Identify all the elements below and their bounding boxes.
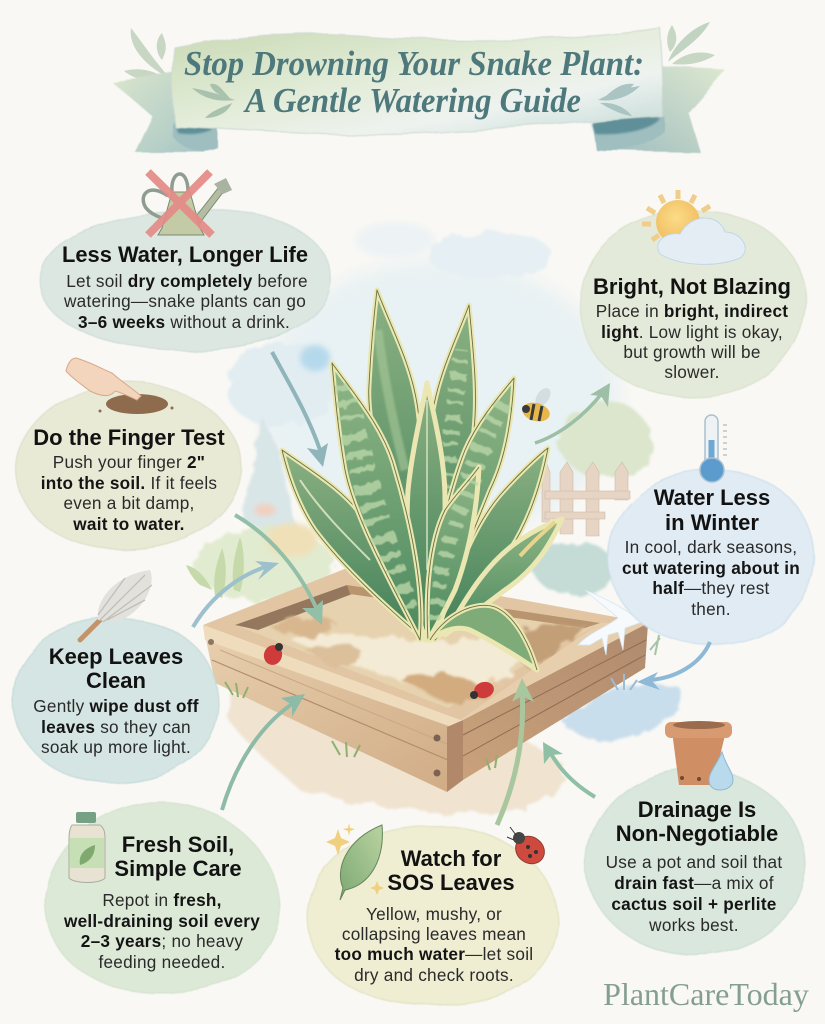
- leaf: droop: [430, 605, 537, 670]
- banner left tail: [112, 72, 205, 152]
- text block: less water: watering—snake plants can go: [63, 291, 306, 311]
- text block: fresh soil: Repot in fresh,: [102, 890, 222, 910]
- box corner post: [447, 720, 463, 792]
- leaf: back left: [369, 290, 431, 640]
- text block: drainage: drain fast—a mix of: [614, 873, 774, 893]
- leaf: lowest right: [445, 519, 562, 635]
- banner main: [173, 28, 663, 135]
- icon: fertilizer bottle: [69, 812, 105, 882]
- text block: fresh soil: [63, 832, 260, 972]
- icon: ladybug on SOS bubble: [507, 827, 550, 869]
- banner left fold: [172, 122, 218, 151]
- text block: keep leaves: Clean: [86, 668, 146, 693]
- garden fence: [542, 462, 630, 536]
- ground wash under box: [226, 680, 682, 812]
- text block: SOS leaves: [335, 846, 533, 985]
- icon: ladybug on box left: [261, 643, 285, 667]
- text block: finger test: into the soil. If it feels: [41, 473, 217, 493]
- text block: drainage: cactus soil + perlite: [611, 894, 777, 914]
- banner right fold: [592, 116, 664, 150]
- text block: fresh soil: Simple Care: [114, 856, 242, 881]
- title text: A Gentle Watering Guide: [243, 81, 581, 120]
- text block: finger test: [33, 425, 225, 534]
- text block: bright: light. Low light is okay,: [601, 322, 783, 342]
- text block: less water: 3–6 weeks without a drink.: [78, 312, 290, 332]
- bubble: bright: [580, 211, 806, 397]
- title text: Stop Drowning Your Snake Plant:: [184, 44, 644, 83]
- bubble: winter: [608, 470, 815, 645]
- text block: SOS leaves: dry and check roots.: [354, 965, 514, 985]
- arrow: drainage to box: [543, 742, 595, 797]
- text block: keep leaves: soak up more light.: [41, 737, 191, 757]
- text block: bright: [593, 274, 791, 382]
- leaf: right mid: [448, 376, 516, 540]
- text block: finger test: wait to water.: [72, 514, 185, 534]
- text block: drainage: Non-Negotiable: [616, 821, 778, 846]
- text block: fresh soil: 2–3 years; no heavy: [81, 931, 243, 951]
- leaf: front center right: [427, 467, 479, 640]
- snake plant: [282, 290, 562, 670]
- leaf: back right: [433, 302, 478, 496]
- icon: leaf with sparkles: [326, 823, 384, 900]
- text block: less water: Less Water, Longer Life: [62, 242, 308, 267]
- text block: winter: then.: [691, 599, 731, 619]
- arrow: fresh soil to box: [222, 694, 305, 810]
- bubble: SOS: [308, 826, 558, 1005]
- text block: finger test: Push your finger 2": [53, 452, 205, 472]
- text block: finger test: even a bit damp,: [63, 493, 195, 513]
- arrow: less water to plant: [272, 352, 328, 467]
- wooden planter box: [203, 568, 648, 792]
- arrow: winter to box: [637, 642, 710, 690]
- watercolor garden background: [186, 222, 651, 601]
- text block: winter: in Winter: [665, 510, 759, 535]
- text block: winter: half—they rest: [652, 578, 770, 598]
- icon: finger pointing at soil: [66, 358, 174, 414]
- text block: drainage: works best.: [648, 915, 739, 935]
- bubble: drainage: [587, 768, 805, 955]
- banner right fold shadow: [592, 117, 660, 134]
- arrow: keep leaves to plant: [193, 561, 279, 627]
- text block: bright: Bright, Not Blazing: [593, 274, 791, 299]
- text block: SOS leaves: Yellow, mushy, or: [366, 904, 502, 924]
- text block: drainage: Use a pot and soil that: [606, 852, 782, 872]
- bubble: keep leaves: [13, 618, 218, 783]
- leaf: right lower: [435, 448, 548, 640]
- banner left fold shadow: [176, 123, 216, 134]
- icon: thermometer: [700, 415, 727, 482]
- arrow: plant to bright: [535, 383, 610, 443]
- text block: SOS leaves: Watch for: [401, 846, 502, 871]
- snow on box corner: [578, 590, 642, 655]
- box front left face: [203, 625, 460, 792]
- text block: bright: slower.: [664, 362, 720, 382]
- text block: SOS leaves: too much water—let soil: [335, 944, 533, 964]
- box rear inner walls and soil: [203, 568, 648, 720]
- text block: fresh soil: Fresh Soil,: [122, 832, 234, 857]
- icon: sun and cloud: [642, 190, 745, 264]
- icon: feather duster: [80, 570, 152, 640]
- text block: winter: cut watering about in: [622, 558, 800, 578]
- text block: drainage: [606, 797, 782, 935]
- text block: bright: Place in bright, indirect: [596, 301, 788, 321]
- banner right tail: [602, 66, 725, 152]
- text block: keep leaves: leaves so they can: [41, 717, 191, 737]
- text block: SOS leaves: SOS Leaves: [387, 870, 515, 895]
- banner ribbon: [112, 28, 725, 152]
- icon: terracotta pot with drop: [665, 721, 733, 790]
- text block: drainage: Drainage Is: [638, 797, 756, 822]
- leaf: center: [407, 383, 445, 640]
- leaf: left big: [332, 363, 421, 640]
- text block: less water: Let soil dry completely before: [66, 271, 308, 291]
- bubble: fresh soil: [45, 802, 280, 993]
- leaf: far left: [282, 450, 425, 640]
- text block: SOS leaves: collapsing leaves mean: [342, 924, 526, 944]
- icon: bee: [520, 385, 554, 424]
- icon: watering can crossed out: [143, 172, 232, 235]
- text block: winter: [622, 485, 800, 619]
- box right face: [463, 623, 648, 780]
- arrow: SOS to plant: [497, 678, 534, 825]
- logo: PlantCareToday: PlantCareToday: [603, 976, 809, 1012]
- bubble: finger test: [16, 382, 242, 550]
- text block: less water: [62, 242, 308, 332]
- bubble: less water: [40, 211, 330, 350]
- text block: winter: In cool, dark seasons,: [625, 537, 797, 557]
- text block: fresh soil: feeding needed.: [98, 952, 226, 972]
- text block: winter: Water Less: [654, 485, 770, 510]
- text block: keep leaves: [33, 644, 199, 757]
- text block: keep leaves: Keep Leaves: [49, 644, 183, 669]
- grass tufts: [225, 635, 660, 770]
- banner inner leaf left: [192, 84, 235, 118]
- text block: finger test: Do the Finger Test: [33, 425, 225, 450]
- arrow: finger test to soil: [235, 515, 323, 625]
- text block: keep leaves: Gently wipe dust off: [33, 696, 199, 716]
- text block: fresh soil: well-draining soil every: [63, 911, 260, 931]
- icon: ladybug on box right: [470, 680, 496, 700]
- text block: bright: but growth will be: [623, 342, 761, 362]
- corner sprigs: [124, 22, 715, 80]
- banner inner leaf right: [598, 84, 640, 116]
